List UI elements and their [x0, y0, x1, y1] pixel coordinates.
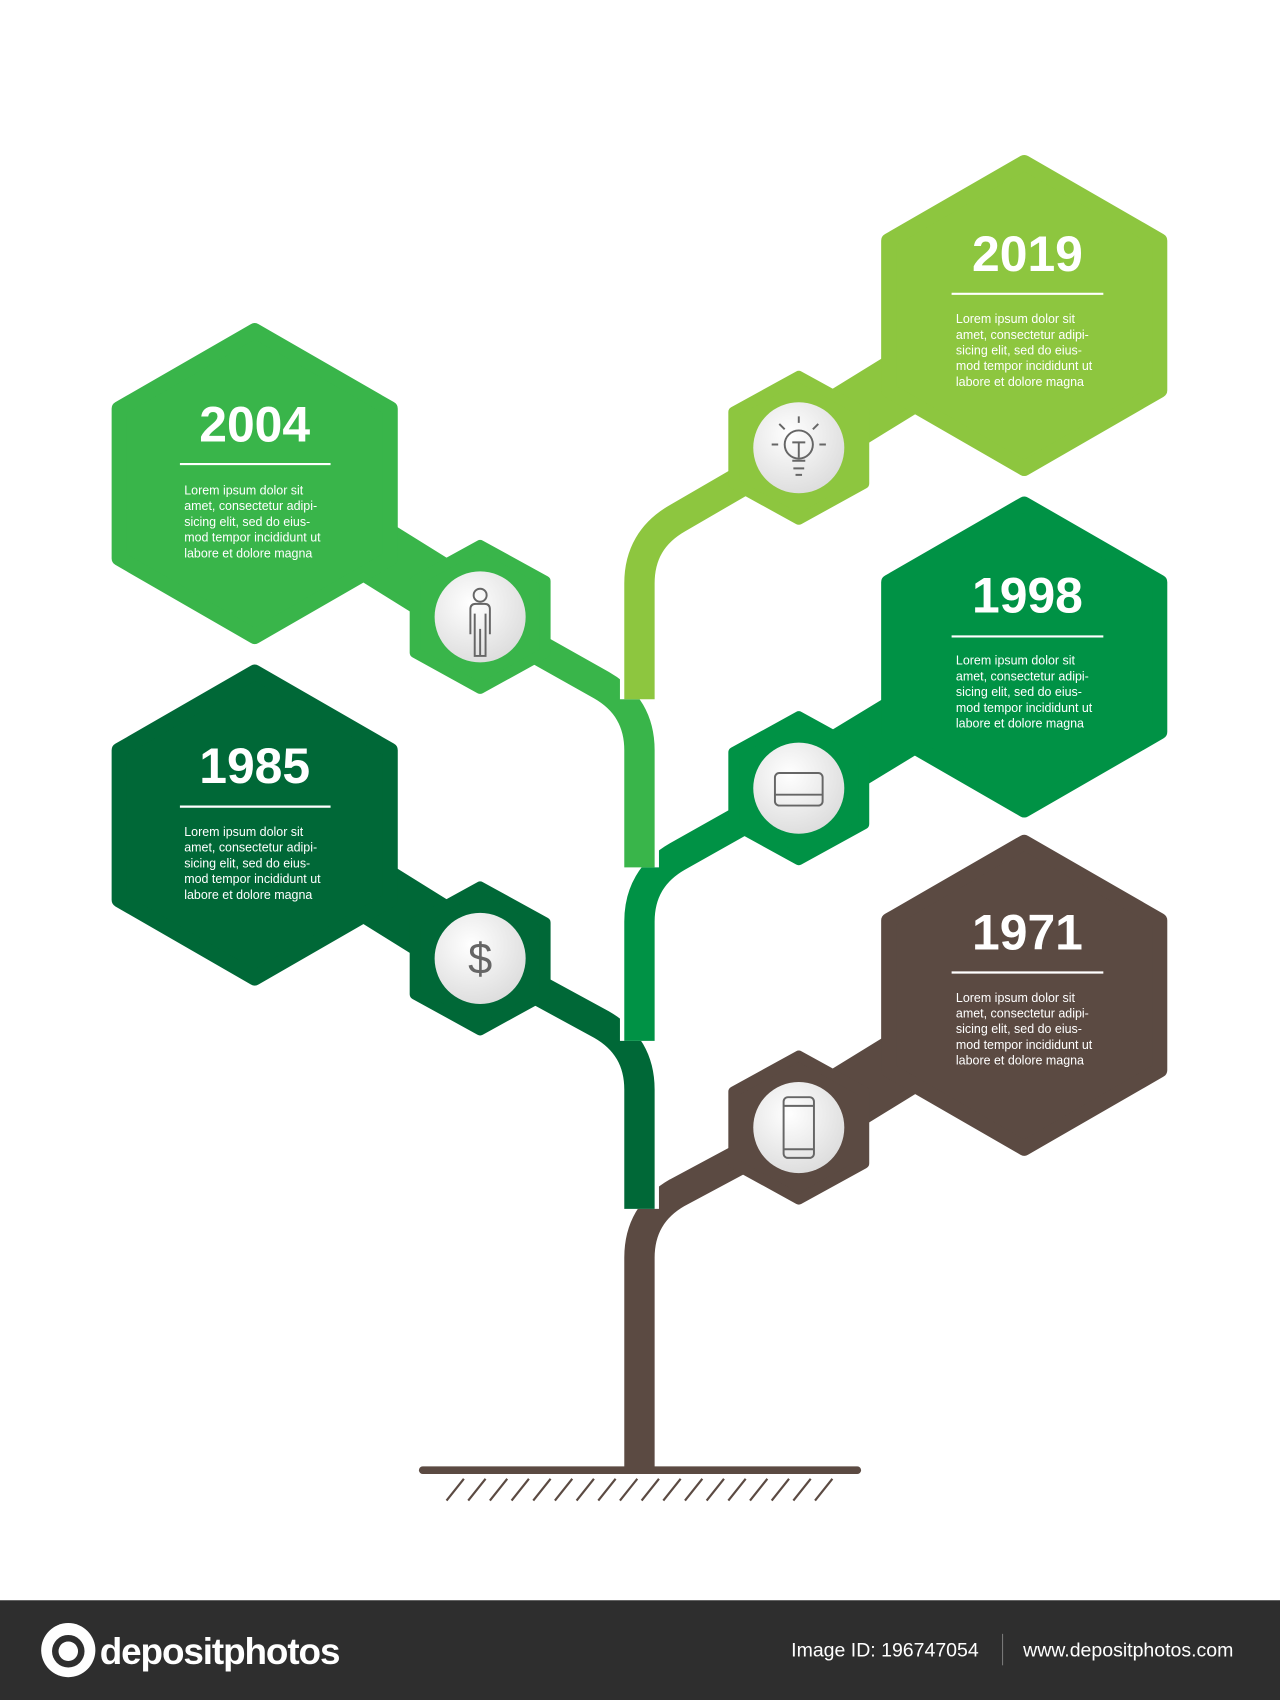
icon: person [470, 589, 490, 656]
stem: 2004 branch [480, 617, 639, 867]
panel: 2019: Lorem ipsum dolor sit [956, 312, 1075, 326]
panel: 1971: amet, consectetur adipi- [956, 1007, 1089, 1021]
panel: 2019: mod tempor incididunt ut [956, 359, 1093, 373]
panel: 2019 [734, 163, 1160, 519]
panel: 1998 [734, 504, 1160, 860]
icon: card [775, 773, 823, 806]
panel: 1985: mod tempor incididunt ut [184, 872, 321, 886]
panel: 1998: labore et dolore magna [956, 716, 1084, 730]
icon: camera logo [41, 1623, 95, 1677]
panel: 1971: Lorem ipsum dolor sit [956, 991, 1075, 1005]
icon: phone [784, 1097, 814, 1158]
stem: 1998 branch [639, 788, 799, 1041]
panel: 2004: sicing elit, sed do eius- [184, 515, 310, 529]
panel: 1971: sicing elit, sed do eius- [956, 1022, 1082, 1036]
panel: 2019: sicing elit, sed do eius- [956, 344, 1082, 358]
footer bar: Image ID: 196747054 [791, 1640, 979, 1662]
panel: 2004 [119, 331, 545, 688]
panel: 1971 [734, 842, 1160, 1199]
panel: 1971: mod tempor incididunt ut [956, 1038, 1093, 1052]
icon: light bulb [772, 416, 826, 475]
panel: 2004: Lorem ipsum dolor sit [184, 483, 304, 497]
footer bar: depositphotos [100, 1631, 339, 1672]
panel: 1971: labore et dolore magna [956, 1054, 1084, 1068]
stem: 2019 branch [639, 448, 799, 699]
panel: 2019: labore et dolore magna [956, 375, 1084, 389]
panel: 1985: labore et dolore magna [184, 888, 312, 902]
panel: 1985: amet, consectetur adipi- [184, 841, 317, 855]
panel: 1998: mod tempor incididunt ut [956, 701, 1093, 715]
panel: 1998: sicing elit, sed do eius- [956, 685, 1082, 699]
stem: 1985 branch [480, 958, 639, 1209]
panel: 1985: Lorem ipsum dolor sit [184, 825, 304, 839]
panel: 2019: 2019 [972, 226, 1083, 282]
footer bar [0, 1600, 1280, 1700]
footer bar: www.depositphotos.com [1022, 1640, 1233, 1662]
panel: 1985: 1985 [199, 738, 310, 794]
panel: 1998: Lorem ipsum dolor sit [956, 654, 1075, 668]
panel: 2019: amet, consectetur adipi- [956, 328, 1089, 342]
panel: 1971: 1971 [972, 905, 1083, 961]
panel: 2004: amet, consectetur adipi- [184, 499, 317, 513]
panel: 2004: 2004 [199, 396, 310, 452]
panel: 1985: sicing elit, sed do eius- [184, 856, 310, 870]
panel: 1985 [119, 672, 545, 1030]
stem: 1971 trunk [639, 1128, 799, 1470]
panel: 2004: labore et dolore magna [184, 546, 312, 560]
panel: 1998: 1998 [972, 568, 1083, 624]
panel: 2004: mod tempor incididunt ut [184, 531, 321, 545]
panel: 1998: amet, consectetur adipi- [956, 669, 1089, 683]
icon: dollar: $ [468, 936, 492, 984]
ground [423, 1470, 857, 1501]
